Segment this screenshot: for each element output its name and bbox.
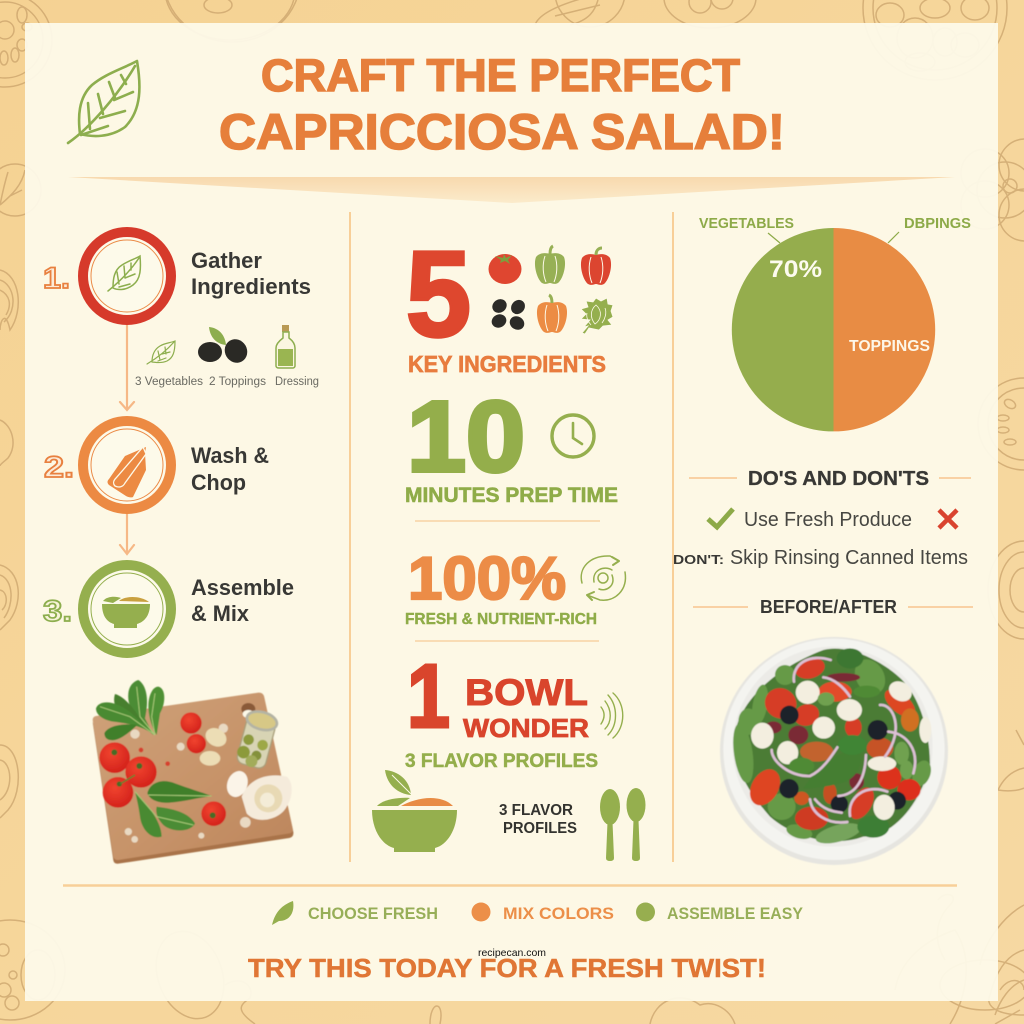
tomatoes [99, 712, 226, 826]
icon: leaf [108, 256, 140, 291]
title leaf icon [68, 61, 139, 143]
feta [751, 677, 931, 820]
stat: 1 bowl wonder: BOWL [465, 672, 588, 713]
bright leaves [789, 686, 913, 788]
legend row: MIX COLORS [503, 904, 614, 923]
crumbs [125, 724, 251, 843]
icon: green dot [636, 902, 655, 922]
step 3: & Mix [191, 601, 250, 626]
don't item: DON'T: [673, 552, 724, 567]
icon: small leaf [147, 341, 175, 364]
pie chart [699, 216, 971, 431]
icon: green pepper [535, 246, 565, 284]
title: CAPRICCIOSA SALAD! [219, 104, 785, 160]
icon: olives [198, 327, 252, 367]
stat: 5 key ingredients: KEY INGREDIENTS [408, 351, 606, 377]
icon: orange dot [472, 902, 490, 922]
icon: spoons [600, 788, 646, 861]
step 3: 3. [43, 595, 72, 628]
icon: legend leaf [272, 901, 293, 925]
stat: 100% fresh: FRESH & NUTRIENT-RICH [405, 611, 597, 628]
onion rings [772, 658, 915, 822]
column dividers [63, 212, 957, 886]
icon: red pepper [581, 248, 611, 285]
icon: fresh cycle [581, 556, 625, 600]
step 2 [44, 421, 269, 509]
step 1: Gather [191, 248, 262, 273]
step 1 sub-items [135, 325, 319, 388]
stat: 5 key ingredients: 5 [406, 226, 471, 362]
heading: before/after: BEFORE/AFTER [760, 597, 897, 617]
step 3: Assemble [191, 575, 294, 600]
stat: 1 bowl wonder: WONDER [463, 713, 589, 743]
step 2: 2. [44, 451, 74, 484]
callout: 3 flavor profiles [499, 802, 577, 837]
icon: salad bowl [372, 770, 457, 852]
stat: 100% fresh [405, 545, 625, 628]
title: CRAFT THE PERFECT [261, 50, 740, 101]
pie chart: 70% [769, 256, 822, 283]
title [219, 50, 785, 160]
icon: orange pepper [537, 295, 567, 333]
heading: do's and don'ts: DO'S AND DON'TS [748, 468, 929, 490]
jar of olives [234, 708, 279, 771]
step 1 sub-items: 3 Vegetables [135, 376, 203, 388]
stat: 1 bowl wonder [405, 647, 623, 772]
bowl of dressing [223, 768, 251, 800]
step 3 [43, 565, 294, 653]
icon: artichoke [581, 298, 613, 334]
stat: 5 key ingredients [406, 226, 613, 377]
legend row: CHOOSE FRESH [308, 904, 438, 923]
watermark: recipecan.com [478, 947, 546, 959]
icon: board and knife [108, 447, 146, 497]
legend row: ASSEMBLE EASY [667, 904, 804, 923]
arrow: step 2 to 3 [120, 514, 134, 554]
stat: 10 minutes prep time: MINUTES PREP TIME [405, 483, 618, 507]
panel: key stats [372, 226, 646, 861]
dark pieces [765, 673, 864, 790]
call to action: TRY THIS TODAY FOR A FRESH TWIST! [248, 953, 766, 983]
leaves [96, 680, 212, 837]
step 1: 1. [43, 262, 70, 295]
ginger slices [202, 724, 230, 750]
panel: steps [43, 232, 319, 653]
callout: 3 flavor profiles: 3 FLAVOR [499, 802, 573, 819]
icon: dressing bottle [276, 325, 295, 368]
step 2: Chop [191, 470, 246, 495]
greens base [735, 649, 930, 841]
step 1: Ingredients [191, 274, 311, 299]
stat: 10 minutes prep time: 10 [407, 381, 525, 493]
olives [779, 706, 906, 813]
stat: 100% fresh: 100% [408, 545, 566, 612]
tomatoes [744, 655, 921, 830]
stat: 10 minutes prep time [405, 381, 618, 507]
step 1 [43, 232, 311, 320]
pie chart: VEGETABLES [699, 216, 794, 232]
icon: sound waves [601, 693, 623, 738]
icon: bowl [102, 597, 150, 628]
icon: tomato [488, 254, 522, 284]
arrow: step 1 to 2 [120, 325, 134, 410]
step 1 sub-items: 2 Toppings [209, 376, 266, 388]
title pointer band [68, 177, 955, 203]
photo: salad bowl [720, 637, 948, 865]
pie chart: TOPPINGS [849, 338, 930, 355]
do item: Use Fresh Produce [744, 509, 912, 531]
don't item: Skip Rinsing Canned Items [730, 546, 968, 569]
stat: 1 bowl wonder: 1 [407, 647, 450, 747]
icon: clock [552, 415, 594, 457]
step 1 sub-items: Dressing [275, 376, 319, 388]
step 2: Wash & [191, 443, 269, 468]
pie chart: DBPINGS [904, 216, 971, 232]
stat: 1 bowl wonder: 3 FLAVOR PROFILES [405, 750, 598, 772]
callout: 3 flavor profiles: PROFILES [503, 820, 577, 837]
icon: red cross [939, 510, 957, 528]
photo: cutting board with ingredients [93, 680, 293, 864]
legend row [272, 901, 804, 925]
icon: olives group [489, 296, 528, 332]
panel: right column [673, 216, 973, 865]
